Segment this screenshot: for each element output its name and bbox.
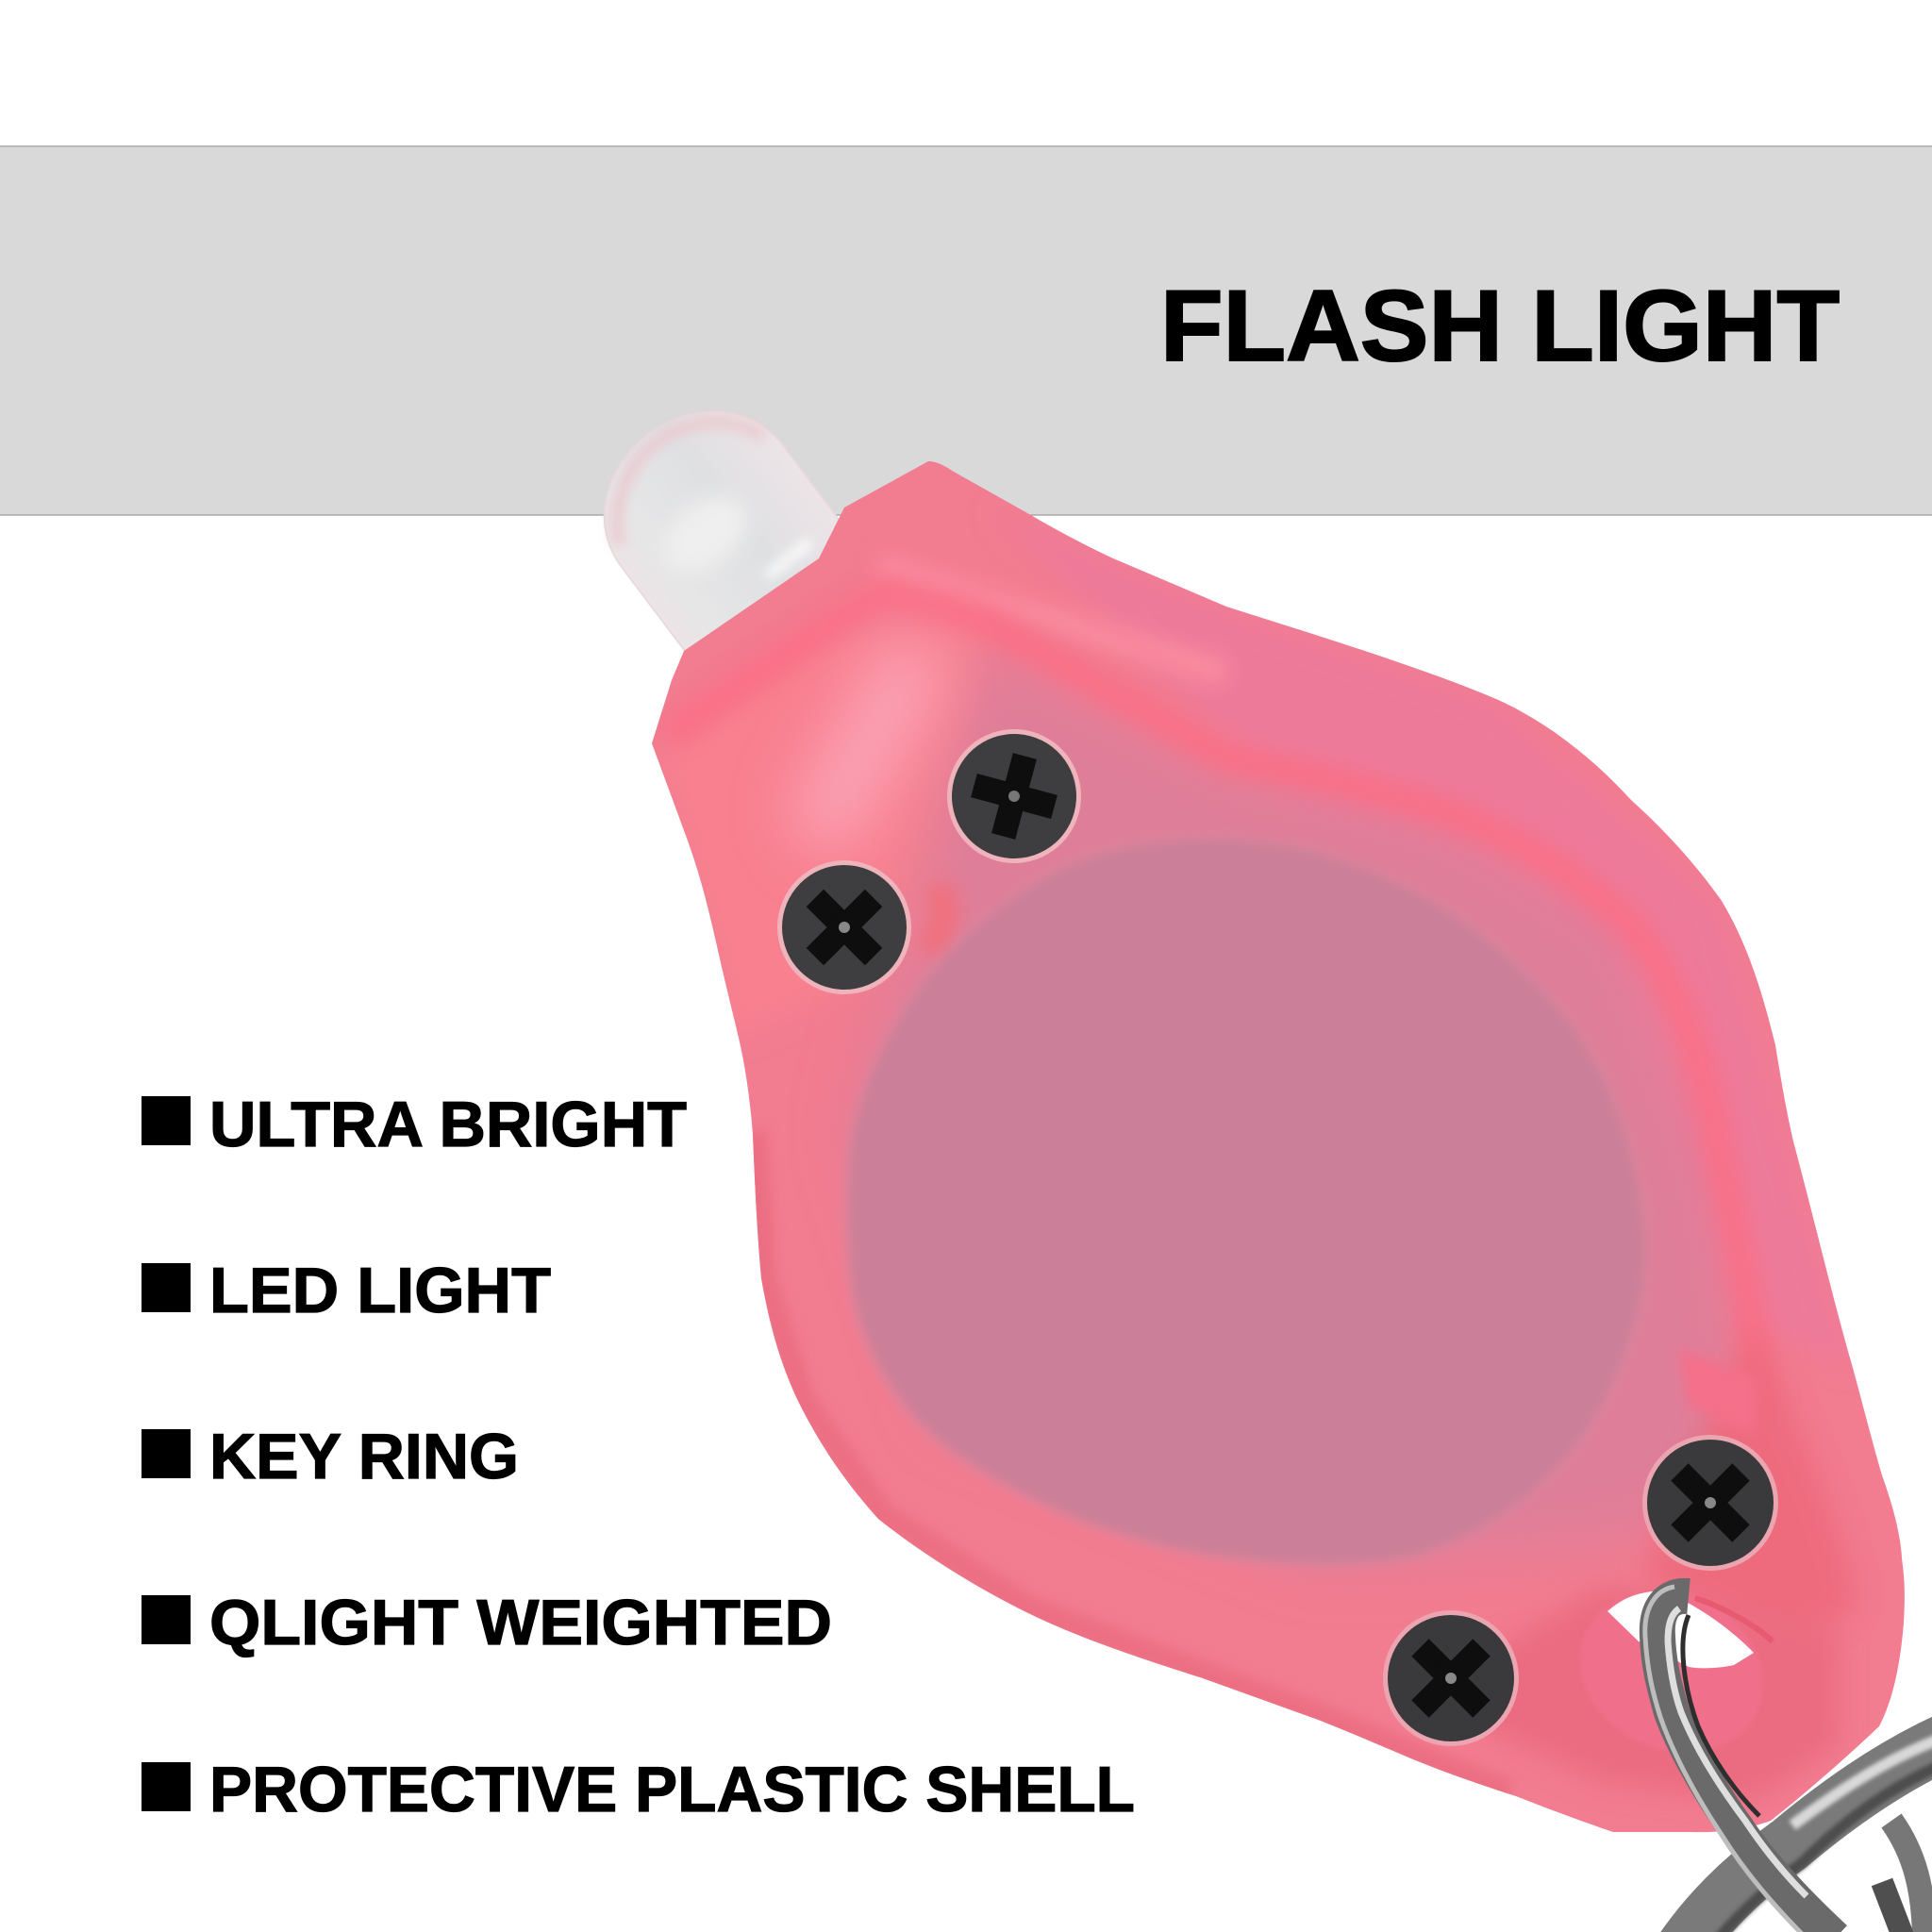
saturated streak xyxy=(667,592,1766,1415)
lower shell tone xyxy=(1645,1351,1857,1626)
screw: lower left xyxy=(1355,1582,1547,1774)
feature: qlight weighted: QLIGHT WEIGHTED xyxy=(209,1587,832,1658)
feature: key ring: KEY RING xyxy=(209,1421,519,1492)
inner plate xyxy=(849,641,1755,1566)
screw: lower right xyxy=(1614,1407,1807,1599)
split ring through hole xyxy=(1645,1587,1835,1932)
LED bulb xyxy=(568,374,863,673)
screw: upper right xyxy=(932,714,1096,878)
shell shading xyxy=(660,509,1858,1802)
feature list xyxy=(142,1089,1135,1825)
title: FLASH LIGHT xyxy=(1160,269,1840,382)
flashlight body xyxy=(652,461,1905,1832)
hole shadow slit xyxy=(1695,1598,1773,1641)
feature: led light: LED LIGHT xyxy=(209,1255,551,1326)
feature: ultra bright: ULTRA BRIGHT xyxy=(209,1089,687,1160)
ring hole xyxy=(1607,1591,1754,1668)
feature: protective plastic shell: PROTECTIVE PLASTIC SHELL xyxy=(209,1754,1135,1825)
large key ring behind the body xyxy=(1684,1736,1932,1932)
header band xyxy=(0,146,1932,515)
mauve lens disc xyxy=(846,839,1646,1565)
screw: upper left xyxy=(750,833,939,1022)
ring hole recess xyxy=(1581,1598,1762,1749)
pink shell xyxy=(652,461,1905,1832)
